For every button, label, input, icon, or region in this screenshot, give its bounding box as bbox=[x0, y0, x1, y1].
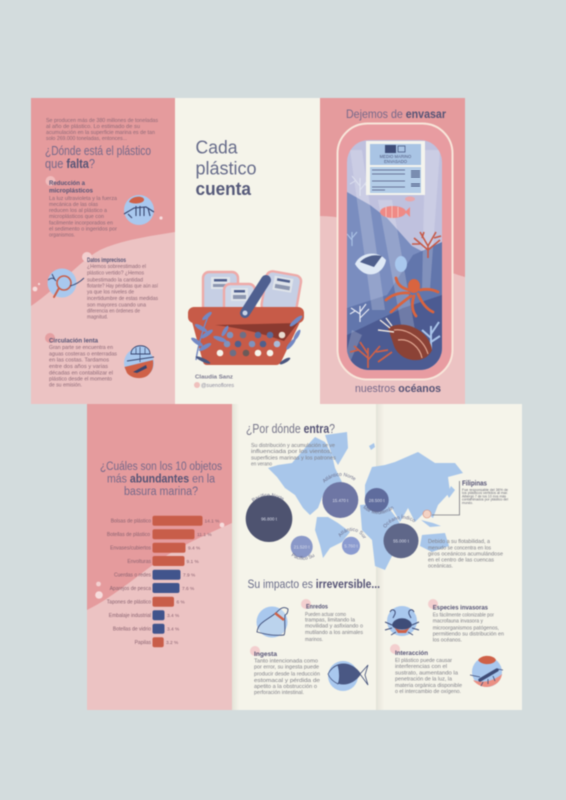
text block: interaction: penetración de la luz, la bbox=[395, 677, 452, 683]
text block: microplastics: microplásticos bbox=[49, 188, 93, 194]
text: distribution bbox=[251, 443, 336, 468]
text block: ingestion: Ingesta bbox=[254, 651, 277, 658]
text block: imprecise data: ¿Hemos sobreestimado el bbox=[87, 264, 146, 270]
basket handle bbox=[245, 280, 266, 313]
ocean scene bbox=[345, 140, 442, 370]
bar chart: 7.6 % bbox=[182, 586, 195, 592]
bar chart: Aparejos de pesca bbox=[110, 586, 151, 592]
callout: Philippines: Albergó 7 de los 10 ríos más bbox=[462, 494, 506, 498]
text block: imprecise data: subestimado la cantidad bbox=[87, 277, 143, 283]
bar chart: 7.9 % bbox=[183, 572, 196, 578]
text block: microplastics: organismos. bbox=[49, 232, 75, 238]
heading: where is the plastic bbox=[45, 144, 151, 171]
bubble: North Atlantic: Atlántico Norte bbox=[322, 472, 356, 483]
world map bbox=[268, 432, 463, 570]
coral bottom left bbox=[350, 342, 392, 368]
text block: entanglement: marinos. bbox=[305, 637, 323, 643]
heading: where is the plastic: ¿Dónde está el plástico bbox=[45, 144, 151, 158]
text block: invasive species: Es fácilmente colonizable por bbox=[433, 612, 494, 618]
text: buoyancy: Debido a su flotabilidad, a bbox=[428, 539, 490, 545]
orange coral bbox=[412, 232, 441, 258]
bar chart: Envases/cubiertos bbox=[110, 546, 151, 552]
text block: interaction: interferencias con el bbox=[395, 664, 447, 670]
heading: objects: más abundantes en la bbox=[107, 474, 216, 486]
basket body bbox=[191, 318, 302, 365]
text block: interaction bbox=[390, 644, 462, 695]
pink fish bbox=[380, 196, 415, 218]
text block: invasive species: microorganismos patógenos, bbox=[433, 626, 499, 632]
text block: slow circulation: Circulación lenta bbox=[49, 338, 98, 344]
text block: ingestion: por error, su ingesta puede bbox=[254, 665, 319, 671]
leaves right bbox=[279, 314, 304, 366]
author: @suenoflores bbox=[201, 383, 235, 389]
bubble: Mediterranean: 28.500 t bbox=[369, 498, 385, 503]
text: distribution: influenciada por los vientos, bbox=[251, 449, 333, 455]
text block: entanglement: Pueden actuar como bbox=[305, 612, 346, 618]
text block: interaction: sustrato, aumentando la bbox=[395, 671, 458, 677]
bubble: Mediterranean: Mar Mediterráneo bbox=[363, 505, 394, 514]
heading: impact: Su impacto es irreversible... bbox=[248, 577, 380, 591]
bubble: North Pacific: 96.800 t bbox=[261, 516, 278, 522]
bubble: South Atlantic: 5.760 t bbox=[344, 544, 358, 548]
intro text: solo 269.000 toneladas, entonces... bbox=[46, 136, 127, 142]
bubble: North Pacific: Pacífico Norte bbox=[251, 492, 284, 502]
text block: microplastics: microplásticos que con bbox=[49, 214, 104, 220]
bar chart: 9.4 % bbox=[188, 546, 201, 552]
text block: invasive species bbox=[428, 599, 504, 644]
text block: ingestion bbox=[250, 646, 320, 696]
text block: interaction: materia orgánica disponible bbox=[395, 683, 462, 689]
product label: ENVASADO bbox=[384, 159, 408, 164]
text block: entanglement: movilidad y asfixiando o bbox=[305, 624, 363, 630]
text block: slow circulation: Gran parte se encuentra en bbox=[49, 345, 113, 351]
callout: Philippines: contaminados por plástico del bbox=[462, 498, 508, 502]
bar chart: 3.2 % bbox=[166, 640, 179, 646]
text block: microplastics: reducen los al plástico a bbox=[49, 208, 107, 214]
octopus bbox=[386, 278, 438, 316]
text block: imprecise data: Datos imprecisos bbox=[87, 257, 126, 264]
bar chart: Envolturas bbox=[127, 559, 151, 565]
text block: invasive species: Especies invasoras bbox=[433, 604, 488, 611]
bubble: North Atlantic bbox=[322, 472, 359, 519]
text: buoyancy: en el centro de las cuencas bbox=[428, 558, 494, 564]
package middle bbox=[224, 284, 255, 316]
text: buoyancy: oceánicas. bbox=[428, 564, 453, 570]
bar chart: Botellas de vidrio bbox=[113, 626, 151, 632]
bubble: South Pacific: 21.520 t bbox=[294, 544, 310, 550]
bubble: North Atlantic: 15.470 t bbox=[332, 498, 349, 503]
bubble: Indian Ocean bbox=[382, 514, 420, 559]
icon: magnifier bbox=[48, 268, 84, 298]
bubble: South Pacific bbox=[290, 535, 315, 560]
icon: fish bbox=[328, 661, 368, 691]
text block: entanglement bbox=[301, 599, 363, 643]
bubble: South Atlantic: Atlántico Sur bbox=[338, 527, 366, 538]
text block: microplastics: La luz ultravioleta y la fuerza bbox=[49, 196, 117, 202]
bubble: North Pacific bbox=[245, 492, 293, 543]
bar chart: 3.4 % bbox=[167, 626, 180, 632]
panel: back cover with packaged ocean bbox=[320, 98, 465, 404]
title bbox=[196, 138, 256, 199]
text block: microplastics: facilmente incorporados en bbox=[49, 220, 113, 226]
text block: entanglement: trampas, limitando la bbox=[305, 618, 355, 624]
package tray bbox=[338, 124, 452, 380]
text: distribution: superficies marinas y los patrones bbox=[251, 456, 336, 462]
text block: ingestion: perforación intestinal. bbox=[254, 690, 304, 696]
white coral lower bbox=[350, 304, 369, 322]
heading: objects: ¿Cuáles son los 10 objetos bbox=[100, 461, 222, 473]
text block: imprecise data: flotante? Hay pérdidas que aún así bbox=[87, 284, 158, 290]
text block: invasive species: permitiendo su distribución en bbox=[433, 632, 504, 638]
bubble: Mediterranean bbox=[363, 488, 394, 514]
text block: ingestion: apetito a la obstrucción o bbox=[254, 684, 317, 690]
bar chart: Embalaje industrial bbox=[109, 613, 151, 619]
panel: plastic missing bbox=[31, 98, 175, 404]
bar chart: Botellas de plástico bbox=[107, 532, 150, 538]
package left bbox=[203, 272, 238, 312]
bar chart: Papilas bbox=[135, 640, 151, 646]
text block: interaction: o el intercambio de oxígeno. bbox=[395, 689, 461, 695]
callout: Philippines bbox=[423, 480, 508, 518]
package right bbox=[261, 270, 302, 316]
text block: imprecise data bbox=[82, 252, 158, 320]
text block: microplastics: el sedimento o ingeridos por bbox=[49, 226, 117, 232]
panel: cover bbox=[175, 98, 320, 404]
text block: interaction: Interacción bbox=[395, 650, 428, 657]
bubble: South Pacific: Pacífico Sur bbox=[291, 552, 315, 560]
bar chart: 9.1 % bbox=[186, 559, 200, 565]
text: buoyancy bbox=[428, 539, 503, 570]
icon: crab bbox=[385, 606, 419, 636]
author: Claudia Sanz bbox=[195, 374, 233, 380]
text block: imprecise data: ya que los niveles de bbox=[87, 290, 134, 296]
icon: seal bbox=[256, 606, 288, 638]
bar chart bbox=[107, 516, 220, 647]
bar chart: 11.1 % bbox=[197, 532, 212, 538]
heading: where does it enter: ¿Por dónde entra? bbox=[246, 422, 335, 436]
bar chart: 6 % bbox=[176, 600, 186, 606]
bar chart: 14.1 % bbox=[204, 518, 220, 524]
nautilus bbox=[378, 318, 432, 360]
bubble: Indian Ocean: 55.000 t bbox=[393, 538, 410, 544]
bar chart: Tapones de plástico bbox=[107, 600, 151, 606]
blue coral bbox=[422, 322, 440, 350]
text: distribution: Su distribución y acumulación se ve bbox=[251, 443, 335, 449]
text block: invasive species: los océanos. bbox=[433, 638, 462, 644]
heading bottom: nuestros océanos bbox=[355, 383, 441, 395]
callout: Philippines: mundo. bbox=[462, 501, 473, 505]
text block: slow circulation: aguas costeras o enterradas bbox=[49, 352, 117, 358]
text block: slow circulation: décadas en contabilizar el bbox=[49, 370, 113, 376]
text block: slow circulation: entre dos años y varias bbox=[49, 364, 108, 370]
text block: imprecise data: incertidumbre de estas medidas bbox=[87, 296, 158, 302]
text block: interaction: El plástico puede causar bbox=[395, 658, 452, 664]
title: plástico bbox=[196, 158, 256, 178]
text block: slow circulation: de su emisión. bbox=[49, 382, 82, 388]
text: distribution: en verano bbox=[251, 462, 272, 468]
white coral top bbox=[350, 176, 366, 196]
title: cuenta bbox=[196, 179, 252, 199]
intro text: acumulación en la superficie marina es de tan bbox=[46, 130, 155, 136]
text block: slow circulation: plástico desde el momento bbox=[49, 376, 112, 382]
text block: ingestion: producir desde la reducción bbox=[254, 671, 320, 677]
callout: Philippines: Fue responsable del 36% de bbox=[462, 488, 508, 492]
icon: microplastics bbox=[124, 195, 154, 225]
title: Cada bbox=[196, 138, 238, 158]
intro text bbox=[46, 118, 158, 142]
intro text: al año de plástico. Lo estimado de su bbox=[46, 124, 140, 130]
text block: slow circulation bbox=[45, 333, 117, 388]
text block: slow circulation: en las costas. Tardamos bbox=[49, 358, 109, 364]
bar chart: Cuerdas o redes bbox=[114, 572, 151, 578]
bar chart: Bolsas de plástico bbox=[111, 518, 151, 524]
light rays bbox=[345, 150, 440, 362]
icon: beach umbrella bbox=[124, 346, 154, 378]
text: buoyancy: giros oceánicos acumulándose bbox=[428, 552, 503, 558]
text block: microplastics: Reducción a bbox=[49, 180, 85, 187]
text block: imprecise data: magnitud. bbox=[87, 314, 108, 320]
panel: top 10 objects bbox=[87, 404, 232, 710]
text block: imprecise data: diferencia en órdenes de bbox=[87, 308, 140, 314]
callout: Philippines: Filipinas bbox=[462, 480, 487, 488]
text block: imprecise data: son mayores cuando una bbox=[87, 302, 146, 308]
text block: microplastics bbox=[46, 176, 117, 238]
bar chart: 3.4 % bbox=[167, 613, 180, 619]
icon: isopod bbox=[470, 656, 503, 687]
heading: objects bbox=[100, 461, 222, 498]
product label bbox=[366, 141, 425, 195]
blue and white fish bbox=[347, 232, 407, 274]
leaves left bbox=[190, 311, 230, 365]
text block: microplastics: mecánica de las olas bbox=[49, 202, 98, 208]
bubble: South Atlantic bbox=[338, 527, 366, 556]
illustration: basket of packages bbox=[188, 270, 304, 366]
text block: entanglement: mutilando a los animales bbox=[305, 630, 363, 636]
heading: where is the plastic: que falta? bbox=[45, 157, 95, 171]
product label: MEDIO MARINO bbox=[380, 154, 412, 159]
basket holes bbox=[217, 332, 285, 356]
text block: entanglement: Enredos bbox=[306, 603, 328, 610]
author bbox=[194, 374, 235, 389]
heading top: Dejemos de envasar bbox=[346, 107, 446, 121]
text: buoyancy: menudo se concentra en los bbox=[428, 545, 491, 551]
bubble: Indian Ocean: Océano Índico bbox=[382, 514, 416, 528]
callout: Philippines: los plásticos vertidos al mar. bbox=[462, 491, 508, 495]
heading: objects: basura marina? bbox=[124, 486, 198, 498]
text block: imprecise data: plástico vertido? ¿Hemos bbox=[87, 271, 144, 277]
text block: ingestion: Tanto intencionada como bbox=[254, 658, 318, 664]
intro text: Se producen más de 380 millones de toneladas bbox=[46, 118, 158, 124]
text block: ingestion: estomacal y pérdida de bbox=[254, 678, 320, 684]
text block: invasive species: macrofauna invasora y bbox=[433, 619, 483, 625]
